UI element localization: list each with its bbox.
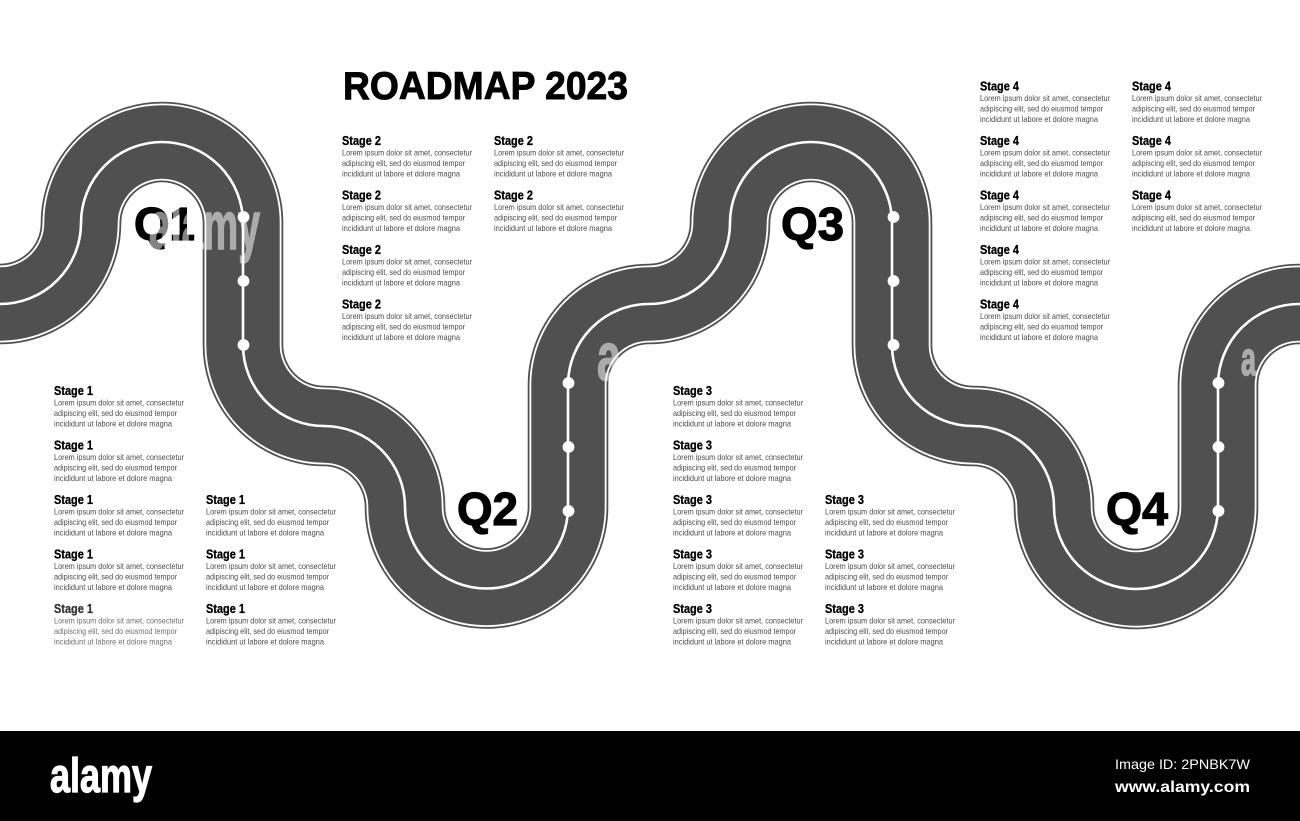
stage 4 item: Lorem ipsum dolor sit amet, consectetur	[980, 256, 1110, 266]
stage 2 item: Stage 2	[342, 243, 381, 257]
stage 3 item: Lorem ipsum dolor sit amet, consectetur	[825, 506, 955, 516]
label Q3: Q3	[781, 198, 844, 250]
stage 1 item: Lorem ipsum dolor sit amet, consectetur	[54, 452, 184, 462]
stage 3 item	[825, 602, 955, 646]
image id: Image ID: 2PNBK7W	[1115, 756, 1251, 772]
stage 2 item	[494, 188, 624, 233]
stage 4 item: Stage 4	[1132, 134, 1171, 148]
stage 4 item: Lorem ipsum dolor sit amet, consectetur	[980, 311, 1110, 321]
panel: Stage 2	[342, 134, 624, 342]
stage 4 item	[1132, 134, 1262, 178]
stage 4 item	[980, 80, 1110, 124]
winding road	[0, 142, 1300, 589]
stage 4 item: incididunt ut labore et dolore magna	[980, 168, 1098, 178]
panel: Stage 4	[980, 80, 1262, 342]
stage 1 item: Lorem ipsum dolor sit amet, consectetur	[54, 506, 184, 516]
stage 1 item	[54, 384, 184, 428]
stage 3 item: Stage 3	[825, 548, 864, 562]
stage 3 item: Stage 3	[673, 548, 712, 562]
stage 2 item: incididunt ut labore et dolore magna	[342, 278, 460, 288]
stage 1 item: adipiscing elit, sed do eiusmod tempor	[54, 517, 177, 527]
stage 2 item: Stage 2	[494, 188, 533, 202]
stage 1 item: Stage 1	[206, 548, 245, 562]
website: www.alamy.com	[1114, 779, 1250, 796]
title: ROADMAP 2023	[343, 65, 628, 108]
stage 2 item	[342, 298, 472, 342]
stage 2 item: incididunt ut labore et dolore magna	[342, 223, 460, 233]
stage 1 item	[206, 548, 336, 592]
stage 2 item: incididunt ut labore et dolore magna	[342, 332, 460, 342]
stage 3 item: adipiscing elit, sed do eiusmod tempor	[673, 517, 796, 527]
stage 4 item: Stage 4	[980, 134, 1019, 148]
stage 2 item	[342, 188, 472, 233]
stage 3 item: incididunt ut labore et dolore magna	[673, 418, 791, 428]
stage 3 item: adipiscing elit, sed do eiusmod tempor	[673, 462, 796, 472]
stage 1 item: Stage 1	[206, 602, 245, 616]
stage 2 item: incididunt ut labore et dolore magna	[342, 168, 460, 178]
stage 1 item: adipiscing elit, sed do eiusmod tempor	[54, 462, 177, 472]
stage 1 item: Lorem ipsum dolor sit amet, consectetur	[206, 561, 336, 571]
stage 3 item: Stage 3	[825, 493, 864, 507]
stage 3 item: adipiscing elit, sed do eiusmod tempor	[825, 626, 948, 636]
stage 1 item: Stage 1	[54, 493, 93, 507]
stage 4 item: Stage 4	[980, 243, 1019, 257]
footer logo: alamy	[50, 750, 152, 803]
stage 3 item	[673, 493, 803, 538]
stage 3 item: adipiscing elit, sed do eiusmod tempor	[673, 626, 796, 636]
stage 4 item: incididunt ut labore et dolore magna	[980, 223, 1098, 233]
stage 3 item	[673, 384, 803, 428]
stage 1 item: Stage 1	[54, 384, 93, 398]
stage 2 item: adipiscing elit, sed do eiusmod tempor	[342, 267, 465, 277]
stage 1 item: Stage 1	[54, 438, 93, 452]
stage 4 item: Lorem ipsum dolor sit amet, consectetur	[980, 93, 1110, 103]
stage 1 item: incididunt ut labore et dolore magna	[54, 528, 172, 538]
stage 4 item: adipiscing elit, sed do eiusmod tempor	[980, 158, 1103, 168]
stage 1 item: incididunt ut labore et dolore magna	[206, 636, 324, 646]
stage 4 item: Lorem ipsum dolor sit amet, consectetur	[1132, 93, 1262, 103]
stage 4 item: Stage 4	[980, 188, 1019, 202]
stage 2 item: incididunt ut labore et dolore magna	[494, 223, 612, 233]
stage 4 item	[1132, 80, 1262, 124]
stage 3 item: incididunt ut labore et dolore magna	[673, 473, 791, 483]
stage 1 item: incididunt ut labore et dolore magna	[54, 418, 172, 428]
stage 3 item: Lorem ipsum dolor sit amet, consectetur	[673, 616, 803, 626]
stage 3 item: incididunt ut labore et dolore magna	[825, 582, 943, 592]
stage 3 item	[825, 548, 955, 592]
label Q2: Q2	[457, 483, 518, 535]
stage 1 item: Stage 1	[206, 493, 245, 507]
stage 1 item: incididunt ut labore et dolore magna	[54, 636, 172, 646]
stage 4 item: Stage 4	[1132, 188, 1171, 202]
stage 3 item	[673, 602, 803, 646]
stage 3 item: Lorem ipsum dolor sit amet, consectetur	[673, 561, 803, 571]
watermark fragments: a	[597, 319, 622, 395]
stage 3 item: adipiscing elit, sed do eiusmod tempor	[825, 517, 948, 527]
stage 2 item	[342, 134, 472, 178]
panel: Stage 3	[673, 384, 955, 646]
stage 4 item	[980, 188, 1110, 233]
stage 1 item: Stage 1	[54, 548, 93, 562]
stage 3 item: Stage 3	[673, 438, 712, 452]
stage 3 item: Lorem ipsum dolor sit amet, consectetur	[825, 561, 955, 571]
stage 2 item: Stage 2	[342, 298, 381, 312]
stage 4 item: incididunt ut labore et dolore magna	[980, 332, 1098, 342]
stage 4 item: adipiscing elit, sed do eiusmod tempor	[1132, 212, 1255, 222]
watermark fragments: a	[1241, 332, 1256, 385]
stage 2 item: Stage 2	[342, 134, 381, 148]
watermark fragments	[149, 188, 1256, 395]
stage 4 item: Lorem ipsum dolor sit amet, consectetur	[1132, 148, 1262, 158]
stage 3 item: incididunt ut labore et dolore magna	[673, 636, 791, 646]
stage 1 item: Lorem ipsum dolor sit amet, consectetur	[54, 561, 184, 571]
stage 3 item: Lorem ipsum dolor sit amet, consectetur	[825, 616, 955, 626]
stage 2 item: adipiscing elit, sed do eiusmod tempor	[494, 212, 617, 222]
stage 2 item	[342, 243, 472, 288]
stage 2 item: Lorem ipsum dolor sit amet, consectetur	[494, 148, 624, 158]
stage 4 item	[980, 243, 1110, 288]
stage 3 item: Lorem ipsum dolor sit amet, consectetur	[673, 506, 803, 516]
stage 3 item: adipiscing elit, sed do eiusmod tempor	[673, 408, 796, 418]
stage 4 item: adipiscing elit, sed do eiusmod tempor	[980, 212, 1103, 222]
stage 3 item: Lorem ipsum dolor sit amet, consectetur	[673, 398, 803, 408]
stage 4 item: adipiscing elit, sed do eiusmod tempor	[980, 322, 1103, 332]
stage 1 item	[54, 548, 184, 592]
stage 4 item: adipiscing elit, sed do eiusmod tempor	[980, 267, 1103, 277]
stage 2 item: Lorem ipsum dolor sit amet, consectetur	[342, 202, 472, 212]
stage 4 item: adipiscing elit, sed do eiusmod tempor	[980, 104, 1103, 114]
label Q1: Q1	[134, 198, 195, 250]
stage 3 item: incididunt ut labore et dolore magna	[673, 582, 791, 592]
stage 1 item: Lorem ipsum dolor sit amet, consectetur	[206, 616, 336, 626]
stage 1 item: adipiscing elit, sed do eiusmod tempor	[54, 408, 177, 418]
stage 3 item	[673, 548, 803, 592]
stage 3 item: incididunt ut labore et dolore magna	[825, 528, 943, 538]
stage 2 item: adipiscing elit, sed do eiusmod tempor	[342, 322, 465, 332]
stage 4 item: Lorem ipsum dolor sit amet, consectetur	[980, 148, 1110, 158]
stage 3 item: Stage 3	[825, 602, 864, 616]
stage 4 item	[980, 298, 1110, 342]
stage 3 item	[825, 493, 955, 538]
stage 1 item: Stage 1	[54, 602, 93, 616]
stage 2 item: adipiscing elit, sed do eiusmod tempor	[342, 212, 465, 222]
stage 1 item: incididunt ut labore et dolore magna	[54, 473, 172, 483]
stage 1 item	[54, 493, 184, 538]
stage 1 item: adipiscing elit, sed do eiusmod tempor	[206, 517, 329, 527]
stage 3 item	[673, 438, 803, 483]
stage 4 item: adipiscing elit, sed do eiusmod tempor	[1132, 158, 1255, 168]
stage 1 item: Lorem ipsum dolor sit amet, consectetur	[206, 506, 336, 516]
stage 3 item: Stage 3	[673, 602, 712, 616]
stage 1 item	[206, 602, 336, 646]
panel: Stage 1	[54, 384, 336, 646]
road milestone dots	[238, 211, 1224, 517]
stage 4 item: incididunt ut labore et dolore magna	[1132, 168, 1250, 178]
stage 1 item: adipiscing elit, sed do eiusmod tempor	[54, 626, 177, 636]
watermark fragments: alamy	[149, 188, 260, 264]
stage 2 item: Stage 2	[494, 134, 533, 148]
stage 4 item: incididunt ut labore et dolore magna	[980, 114, 1098, 124]
stage 4 item: Lorem ipsum dolor sit amet, consectetur	[1132, 202, 1262, 212]
stage 2 item: adipiscing elit, sed do eiusmod tempor	[494, 158, 617, 168]
stage 1 item: adipiscing elit, sed do eiusmod tempor	[54, 572, 177, 582]
stage 1 item: incididunt ut labore et dolore magna	[206, 582, 324, 592]
stage 2 item	[494, 134, 624, 178]
stage 4 item: adipiscing elit, sed do eiusmod tempor	[1132, 104, 1255, 114]
stage 2 item: incididunt ut labore et dolore magna	[494, 168, 612, 178]
stage 1 item: adipiscing elit, sed do eiusmod tempor	[206, 626, 329, 636]
stage 3 item: adipiscing elit, sed do eiusmod tempor	[673, 572, 796, 582]
stage 1 item	[54, 602, 184, 646]
stage 4 item: Stage 4	[980, 298, 1019, 312]
stage 4 item: incididunt ut labore et dolore magna	[1132, 223, 1250, 233]
stage 2 item: Lorem ipsum dolor sit amet, consectetur	[342, 256, 472, 266]
stage 4 item: Stage 4	[1132, 80, 1171, 94]
stage 3 item: incididunt ut labore et dolore magna	[825, 636, 943, 646]
stage 4 item	[980, 134, 1110, 178]
stage 2 item: adipiscing elit, sed do eiusmod tempor	[342, 158, 465, 168]
stage 1 item: incididunt ut labore et dolore magna	[54, 582, 172, 592]
stage 1 item: adipiscing elit, sed do eiusmod tempor	[206, 572, 329, 582]
footer bar	[0, 731, 1300, 821]
stage 2 item: Lorem ipsum dolor sit amet, consectetur	[342, 148, 472, 158]
stage 4 item: incididunt ut labore et dolore magna	[980, 278, 1098, 288]
stage 1 item: Lorem ipsum dolor sit amet, consectetur	[54, 398, 184, 408]
stage 2 item: Lorem ipsum dolor sit amet, consectetur	[342, 311, 472, 321]
stage 1 item	[54, 438, 184, 483]
stage 4 item: Lorem ipsum dolor sit amet, consectetur	[980, 202, 1110, 212]
stage 1 item	[206, 493, 336, 538]
stage 3 item: Stage 3	[673, 493, 712, 507]
stage 2 item: Lorem ipsum dolor sit amet, consectetur	[494, 202, 624, 212]
stage 2 item: Stage 2	[342, 188, 381, 202]
label Q4: Q4	[1106, 483, 1168, 535]
stage 3 item: Stage 3	[673, 384, 712, 398]
stage 3 item: incididunt ut labore et dolore magna	[673, 528, 791, 538]
stage 1 item: Lorem ipsum dolor sit amet, consectetur	[54, 616, 184, 626]
stage 4 item: Stage 4	[980, 80, 1019, 94]
stage 4 item	[1132, 188, 1262, 233]
stage 4 item: incididunt ut labore et dolore magna	[1132, 114, 1250, 124]
stage 3 item: adipiscing elit, sed do eiusmod tempor	[825, 572, 948, 582]
stage 3 item: Lorem ipsum dolor sit amet, consectetur	[673, 452, 803, 462]
stage 1 item: incididunt ut labore et dolore magna	[206, 528, 324, 538]
